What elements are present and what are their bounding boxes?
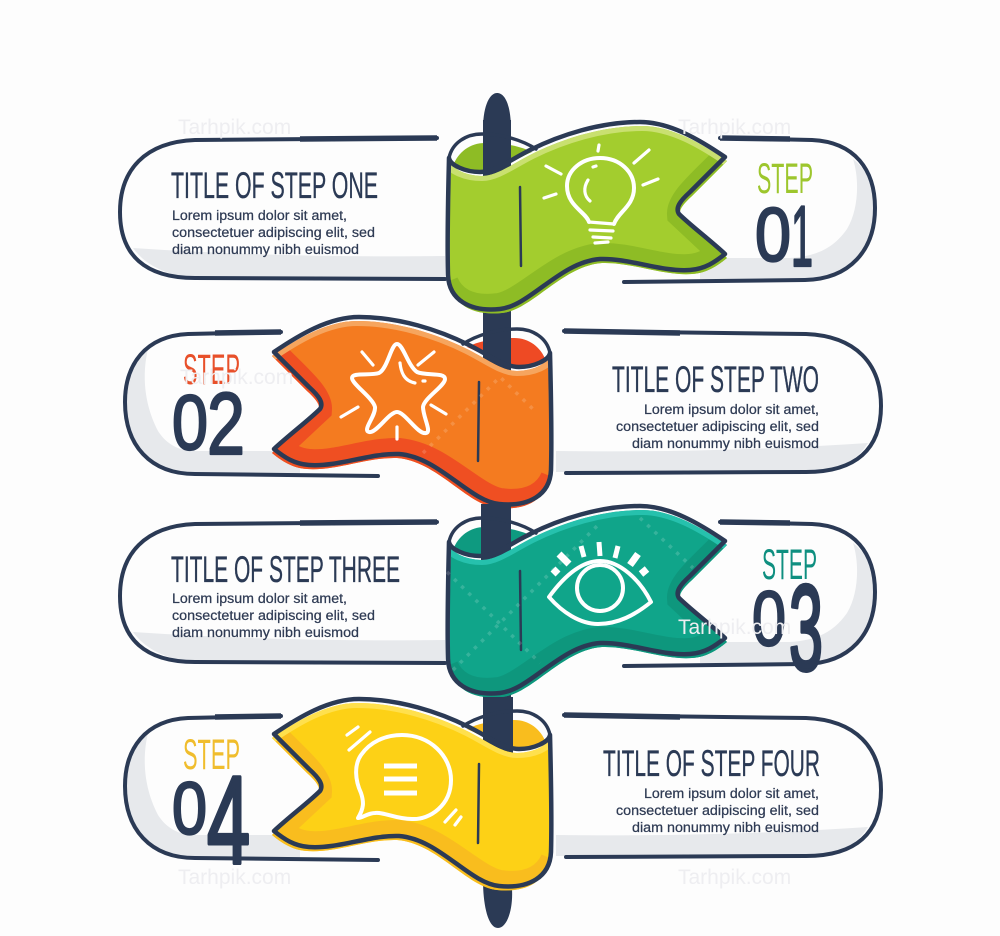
- panel: step three text pill: [120, 522, 445, 663]
- text: step four description: Lorem ipsum dolor sit amet,: [644, 786, 819, 801]
- flag pole: [483, 93, 512, 928]
- icon: eye: [549, 542, 651, 624]
- watermarks: Tarhpik.com: [178, 116, 291, 139]
- heading: title of step three: TITLE OF STEP THREE: [171, 549, 400, 590]
- icon: speech bubble: [347, 727, 461, 825]
- text: step one description: diam nonummy nibh euismod: [172, 242, 359, 257]
- panel: step two text pill: [556, 331, 881, 473]
- text: step three description: Lorem ipsum dolor sit amet,: [172, 591, 347, 606]
- panel: step three number pill: STEP: [762, 541, 817, 589]
- panel: step two number pill: [125, 332, 378, 476]
- text: step four description: consectetuer adipiscing elit, sed: [616, 803, 819, 818]
- text: step four description: [616, 786, 819, 835]
- panel: step one number pill: [624, 138, 875, 285]
- number: 04: 4: [207, 752, 250, 890]
- text: step two description: [616, 402, 819, 451]
- icon: light bulb: [544, 145, 658, 243]
- panel: step one number pill: STEP: [757, 155, 813, 203]
- panel: step three number pill: [624, 522, 875, 696]
- panel: step four text pill: [556, 715, 881, 857]
- watermarks: Tarhpik.com: [180, 366, 293, 389]
- heading: title of step four: TITLE OF STEP FOUR: [603, 743, 820, 784]
- flag: step four yellow: [272, 697, 559, 890]
- number: 02: [172, 374, 245, 473]
- flag: step two orange: [272, 315, 559, 508]
- label: step 4: STEP: [183, 731, 240, 779]
- text: step four description: diam nonummy nibh euismod: [632, 820, 819, 835]
- label: step 2: STEP: [183, 346, 240, 394]
- number: 01: [755, 189, 813, 285]
- number: 02: 0: [172, 378, 208, 466]
- watermarks: Tarhpik.com: [178, 866, 291, 889]
- text: step one description: [172, 208, 375, 257]
- text: step three description: [172, 591, 375, 640]
- number: 04: 0: [172, 767, 207, 850]
- watermarks: Tarhpik.com: [678, 866, 791, 889]
- text: step two description: diam nonummy nibh euismod: [632, 436, 819, 451]
- heading: title of step two: TITLE OF STEP TWO: [612, 359, 819, 400]
- panel: step one number pill: 1: [791, 189, 813, 285]
- number: 03: 0: [752, 574, 786, 662]
- text: step three description: diam nonummy nibh euismod: [172, 625, 359, 640]
- watermarks: Tarhpik.com: [678, 616, 791, 639]
- panel: step one text pill: [120, 138, 445, 279]
- flag: step one green: [440, 120, 727, 313]
- text: step one description: Lorem ipsum dolor sit amet,: [172, 208, 347, 223]
- watermarks: [178, 116, 791, 889]
- number: 03: 3: [789, 560, 823, 696]
- number: 02: 2: [207, 374, 245, 473]
- number: 01: 0: [755, 193, 791, 278]
- text: step three description: consectetuer adipiscing elit, sed: [172, 608, 375, 623]
- panel: step four number pill: [125, 716, 378, 890]
- icon: star: [341, 344, 446, 439]
- watermarks: Tarhpik.com: [678, 116, 791, 139]
- text: step one description: consectetuer adipiscing elit, sed: [172, 225, 375, 240]
- number: 03: [752, 560, 823, 696]
- number: 04: [172, 752, 250, 890]
- text: step two description: consectetuer adipiscing elit, sed: [616, 419, 819, 434]
- heading: title of step one: TITLE OF STEP ONE: [171, 165, 378, 206]
- flag: step three teal: [440, 504, 727, 697]
- text: step two description: Lorem ipsum dolor sit amet,: [644, 402, 819, 417]
